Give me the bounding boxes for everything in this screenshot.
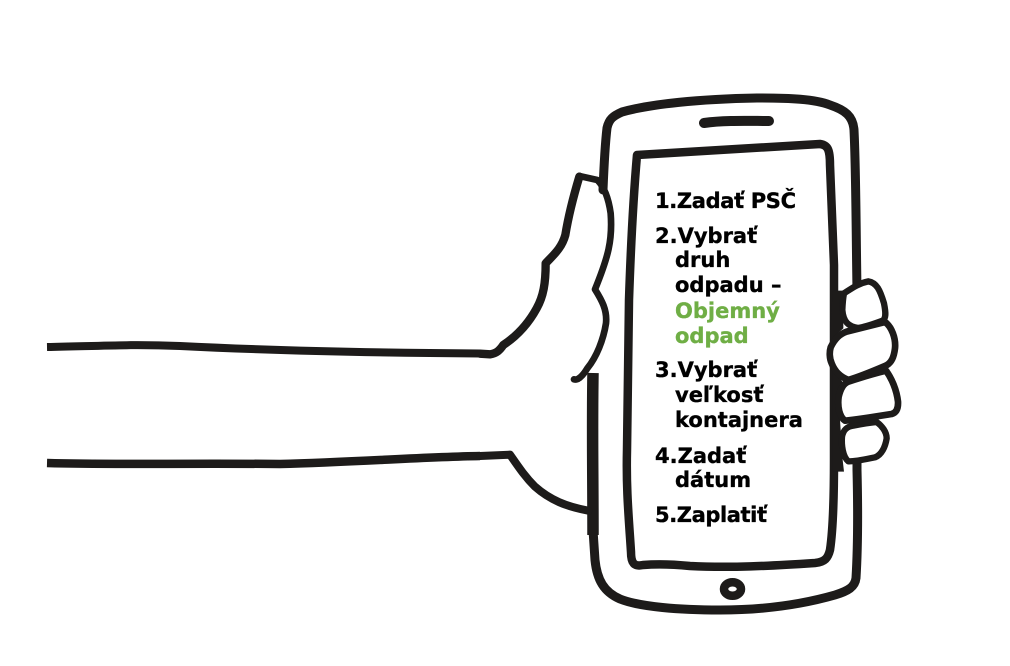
finger 2 xyxy=(830,322,895,380)
phone left side xyxy=(587,373,599,535)
thumb xyxy=(480,176,611,511)
step 2 highlighted waste type xyxy=(675,299,780,348)
step 3 xyxy=(655,358,803,432)
step 4: dátum xyxy=(675,468,751,492)
finger 3 xyxy=(838,371,898,421)
icon: phone outline xyxy=(593,98,858,610)
finger 4 xyxy=(842,422,887,461)
step 3: kontajnera xyxy=(675,408,803,432)
home button xyxy=(724,582,741,596)
text panel background xyxy=(650,182,823,532)
step 2 highlighted waste type: Objemný xyxy=(675,299,780,323)
step 2 highlighted waste type: odpad xyxy=(675,324,749,348)
arm upper line xyxy=(47,345,480,354)
step 2: 2.Vybrať xyxy=(655,224,758,248)
earpiece xyxy=(704,121,769,123)
icon: arm and thumb xyxy=(47,176,611,511)
phone screen frame xyxy=(627,144,834,567)
arm lower line xyxy=(47,456,480,464)
finger base wedges xyxy=(830,291,844,472)
finger 1 xyxy=(842,281,885,328)
step 4 xyxy=(655,444,751,492)
step 1: 1.Zadať PSČ xyxy=(655,188,796,213)
step 5: 5.Zaplatiť xyxy=(655,503,768,527)
step 2: odpadu – xyxy=(675,273,781,297)
step 3: 3.Vybrať xyxy=(655,358,758,382)
step 2 xyxy=(655,224,781,348)
step 4: 4.Zadať xyxy=(655,444,747,468)
step 2: druh xyxy=(675,248,730,272)
icon: fingers xyxy=(830,281,898,472)
step 3: veľkosť xyxy=(675,383,764,407)
phone outer frame xyxy=(593,98,858,610)
